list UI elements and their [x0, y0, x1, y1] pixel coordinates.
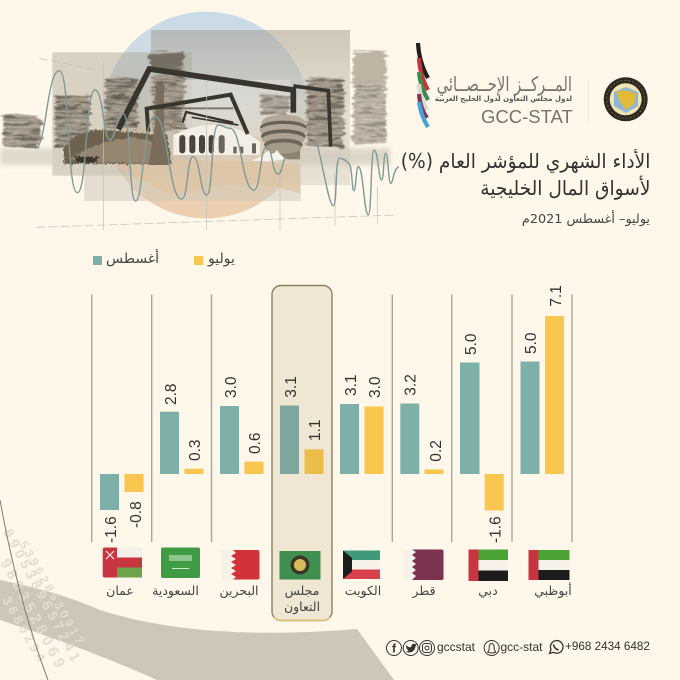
- group: Bahrain: 3.0: [223, 376, 240, 398]
- flag: Qatar: [404, 550, 444, 580]
- collage photo panels: [0, 30, 390, 201]
- flag: Oman: [103, 548, 142, 578]
- footer handle: gccstat: gccstat: [437, 640, 475, 654]
- decorative digit ribbon: 5 3 9 6 2 8 5 3 0 9 1 7: [16, 538, 87, 647]
- group: Abu Dhabi: 5.0: [523, 332, 540, 354]
- country label: GCC: مجلس: [285, 583, 319, 598]
- group: Qatar: 0.2: [428, 440, 445, 462]
- country label: Dubai: دبي: [478, 583, 498, 598]
- thin chart guide lines: [37, 59, 397, 230]
- legend label: July: يوليو: [208, 251, 235, 267]
- legend label: August: أغسطس: [106, 251, 159, 267]
- country label: Oman: عمان: [106, 583, 134, 598]
- country label: Bahrain: البحرين: [219, 583, 258, 598]
- decorative digit ribbon: 8 9 0 5 3 8 9 6 5 7 2 4 1: [0, 526, 84, 664]
- group: Qatar: 3.2: [403, 374, 420, 396]
- country label: Qatar: قطر: [412, 583, 436, 598]
- stock trend line: [35, 71, 399, 215]
- flag: Dubai: [468, 550, 508, 581]
- social icons: [386, 640, 563, 656]
- group: Abu Dhabi: 7.1: [548, 285, 565, 307]
- group: GCC: [280, 376, 324, 474]
- group: Kuwait: 3.1: [343, 374, 360, 396]
- logo: colored ribbon: [418, 43, 428, 127]
- GCC emblem: [604, 77, 648, 121]
- country label: Abu Dhabi: أبوظبي: [534, 583, 572, 598]
- icon: twitter: [403, 640, 418, 656]
- country label: Saudi Arabia: السعودية: [152, 583, 199, 598]
- group: Saudi Arabia: [160, 383, 204, 474]
- group: Kuwait: [340, 374, 384, 474]
- title: [400, 149, 650, 200]
- bar chart: [100, 285, 565, 543]
- flag: Saudi Arabia: [161, 548, 200, 578]
- icon: whatsapp: [550, 641, 563, 654]
- logo: GCC-STAT wordmark: GCC-STAT: [481, 106, 573, 127]
- group: Bahrain: [220, 376, 264, 474]
- country label: Kuwait: الكويت: [345, 583, 381, 598]
- decorative digit ribbon: 3 6 8 0 2 9 4: [0, 594, 49, 665]
- group: Dubai: -1.6: [488, 516, 505, 543]
- group: Abu Dhabi: [520, 285, 565, 474]
- icon: snapchat: [484, 640, 499, 656]
- group: Bahrain: 0.6: [247, 432, 264, 454]
- rock mound: [63, 129, 172, 164]
- group: Saudi Arabia: 0.3: [187, 439, 204, 461]
- white arched building: [173, 125, 260, 155]
- country label: GCC: التعاون: [284, 599, 320, 614]
- group: Kuwait: 3.0: [367, 376, 384, 398]
- icon: facebook: f: [392, 642, 397, 656]
- logo divider: [588, 80, 589, 122]
- subtitle: period: يوليو– أغسطس 2021م: [522, 212, 650, 227]
- decorative arc line: [0, 500, 48, 680]
- obelisk tower: [148, 83, 170, 165]
- group: Oman: [100, 474, 145, 543]
- dark steel frames: [118, 69, 331, 147]
- group: Dubai: [460, 333, 505, 543]
- title: لأسواق المال الخليجية: [480, 176, 650, 200]
- group: Qatar: [400, 374, 445, 474]
- group: Saudi Arabia: 2.8: [163, 383, 180, 405]
- group: GCC: 1.1: [307, 419, 324, 441]
- hero collage illustration: [0, 12, 399, 230]
- title: الأداء الشهري للمؤشر العام (%): [400, 149, 650, 173]
- icon: facebook: [386, 640, 402, 656]
- stacked towers: [3, 52, 386, 147]
- group: Oman: -0.8: [128, 501, 145, 528]
- white tent: [252, 150, 287, 161]
- column divider lines: [92, 294, 572, 542]
- flag: Kuwait: [343, 550, 380, 579]
- group: Oman: -1.6: [103, 516, 120, 543]
- logo: Arabic name: المــركــز الإحــصــائي: [437, 72, 572, 96]
- group: Dubai: 5.0: [463, 333, 480, 355]
- flag: Abu Dhabi: [528, 550, 570, 580]
- round tiered building: [260, 115, 307, 159]
- country label: GCC: [284, 583, 320, 614]
- group: GCC: 3.1: [283, 376, 300, 398]
- backdrop circle: [103, 12, 309, 218]
- icon: instagram: [420, 640, 434, 656]
- flag: GCC: [280, 551, 320, 580]
- legend swatches: [93, 256, 203, 265]
- logo: Arabic subtitle: لدول مجلس التعاون لدول الخليج العربية: [435, 95, 572, 103]
- background swoosh band: [0, 580, 394, 680]
- footer handle: gcc-stat: gcc-stat: [500, 640, 543, 654]
- highlight panel: GCC column: [272, 286, 332, 620]
- flag: Bahrain: [221, 550, 260, 580]
- footer phone number: +968 2434 6482: [565, 640, 650, 653]
